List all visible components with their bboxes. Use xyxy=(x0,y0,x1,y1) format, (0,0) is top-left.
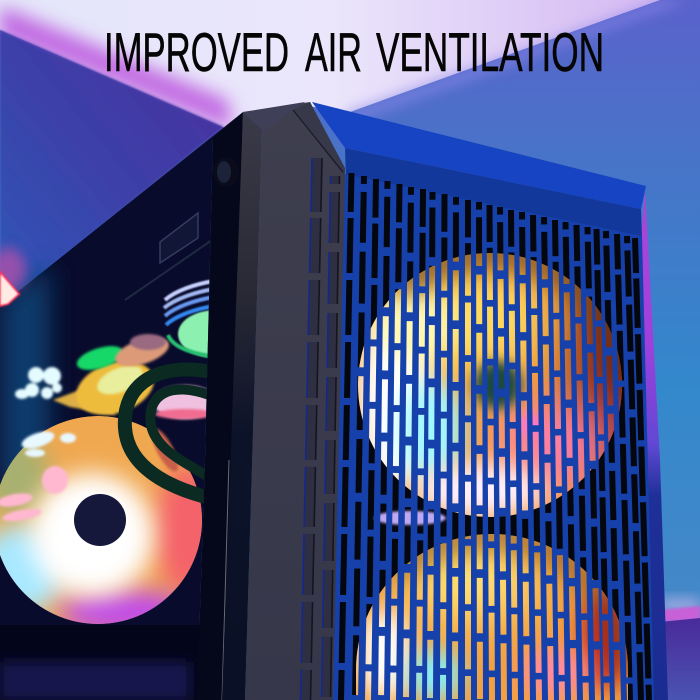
title xyxy=(104,22,604,83)
title: IMPROVED xyxy=(104,22,289,83)
dark glass side panel xyxy=(0,112,243,700)
lower fan xyxy=(350,530,635,700)
coolant tubes xyxy=(125,369,212,498)
cooler reservoir lights xyxy=(53,332,217,475)
blue front header band xyxy=(345,148,642,238)
violet glow between fans xyxy=(374,511,446,525)
top RGB ring xyxy=(162,278,210,359)
title: AIR xyxy=(305,22,362,83)
thumb screw xyxy=(213,157,239,187)
white RAM lights xyxy=(15,367,62,399)
glass black border strip xyxy=(197,112,243,700)
top blue panel xyxy=(312,102,646,209)
fan lights seen through mesh slots xyxy=(330,170,660,700)
right pink side edge xyxy=(641,190,668,700)
sticker label xyxy=(160,213,198,263)
pillar vent slots xyxy=(300,158,340,700)
grey front pillar xyxy=(222,102,345,700)
case interior seen through glass xyxy=(0,212,210,624)
red wall light xyxy=(0,248,26,306)
internal cable line xyxy=(125,240,212,300)
front mesh frame xyxy=(333,174,654,700)
left fan: lit RGB ring with dark hub xyxy=(0,416,202,624)
upper fan xyxy=(358,253,622,517)
